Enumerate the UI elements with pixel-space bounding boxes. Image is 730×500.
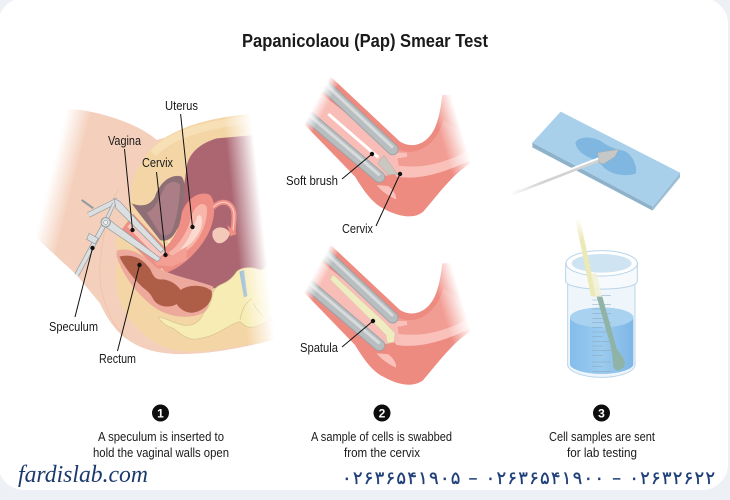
skin: [33, 109, 273, 354]
step number 2: 2: [379, 406, 386, 420]
uterus: [156, 194, 214, 273]
spatula in container: [575, 219, 597, 297]
label: Soft brush: Soft brush: [286, 174, 338, 188]
step 1 text: [93, 430, 229, 460]
step number 3: 3: [598, 406, 605, 420]
bladder: [132, 176, 185, 241]
panel: anatomy with speculum: [33, 99, 273, 366]
website: fardislab.com: [18, 462, 148, 488]
step 1 caption: [93, 404, 229, 460]
speculum: [77, 198, 164, 275]
label: Uterus: Uterus: [165, 99, 198, 113]
sample container: [566, 219, 637, 377]
step number 2: [374, 404, 390, 422]
panel: soft brush illustration: [286, 76, 480, 236]
step 3 caption: [549, 404, 655, 460]
swab on slide: [510, 149, 619, 195]
rectum: [117, 250, 213, 317]
leader lines: anatomy: [75, 114, 194, 351]
label: Speculum: Speculum: [49, 320, 98, 334]
step 2 caption: [311, 404, 452, 460]
step 1 text: hold the vaginal walls open: [93, 446, 229, 460]
step 2 text: [311, 430, 452, 460]
panel: spatula illustration: [300, 244, 480, 385]
step 2 text: from the cervix: [344, 446, 421, 460]
phone numbers: ۰۲۶۳۶۵۴۱۹۰۵ – ۰۲۶۳۶۵۴۱۹۰۰ – ۰۲۶۳۲۶۲۲: [342, 468, 715, 489]
step 3 text: [549, 430, 655, 460]
step number 1: 1: [157, 406, 164, 420]
leader line: spatula: [342, 319, 375, 347]
step 2 text: A sample of cells is swabbed: [311, 430, 452, 444]
ovary: [212, 227, 230, 243]
label: Cervix: Cervix: [342, 222, 374, 236]
title: Papanicolaou (Pap) Smear Test: [242, 31, 488, 51]
step 3 text: for lab testing: [567, 446, 637, 460]
leader lines: brush: [342, 152, 402, 226]
label: Vagina: Vagina: [108, 134, 141, 148]
vagina: [122, 214, 164, 270]
abdominal cavity: [167, 133, 273, 288]
fat layer: [116, 113, 273, 351]
label: Cervix: Cervix: [142, 156, 174, 170]
label: Rectum: Rectum: [99, 352, 136, 366]
label: Spatula: Spatula: [300, 341, 338, 355]
fallopian tube: [213, 202, 234, 235]
panel: slide and sample container: [510, 112, 680, 377]
brush: [328, 114, 378, 157]
step 3 text: Cell samples are sent: [549, 430, 655, 444]
step 1 text: A speculum is inserted to: [98, 430, 224, 444]
pelvic bones: [158, 268, 273, 339]
glass slide: [532, 112, 680, 211]
spatula: [330, 275, 395, 343]
spine canal: [239, 270, 247, 297]
